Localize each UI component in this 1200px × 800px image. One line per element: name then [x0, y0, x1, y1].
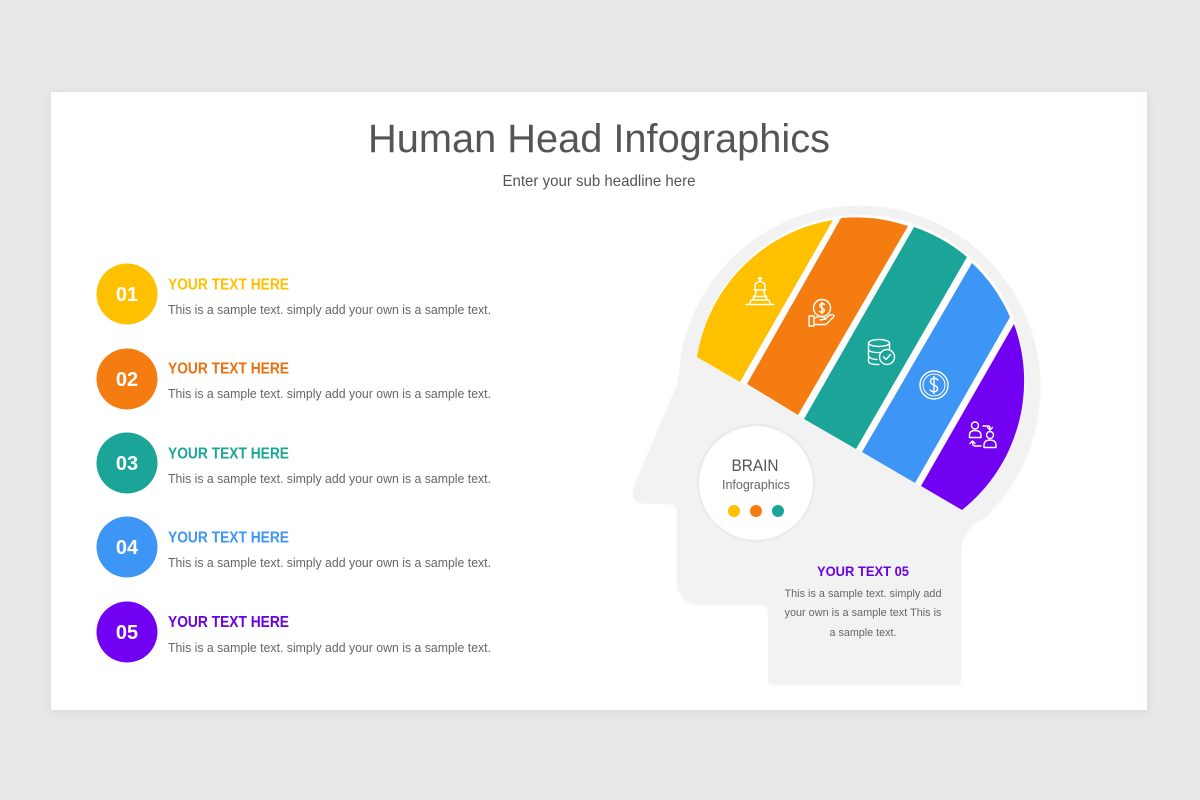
brain segment: yellow [697, 220, 833, 382]
list item 05: 05 [116, 622, 138, 644]
brain center badge [698, 425, 814, 541]
list item 03: This is a sample text. simply add your own is a sample text. [168, 472, 491, 486]
list item 01: YOUR TEXT HERE [168, 276, 289, 294]
list item 02 [96, 348, 491, 410]
list item 05 [96, 602, 491, 662]
list item 04: 04 [116, 537, 139, 559]
brain center badge: Infographics [722, 477, 790, 492]
list item 01: 01 [116, 284, 138, 306]
list item 04: This is a sample text. simply add your own is a sample text. [168, 556, 491, 570]
head silhouette [633, 206, 1040, 684]
brain segment: teal [804, 227, 967, 449]
icon: database with check [868, 340, 894, 364]
icon: dollar coin [920, 371, 948, 399]
brain segment: orange [747, 217, 908, 415]
list item 01: This is a sample text. simply add your own is a sample text. [168, 303, 491, 317]
white card panel [51, 92, 1147, 710]
list item 03: 03 [116, 453, 138, 475]
callout: your text 05: your own is a sample text This is [784, 607, 942, 619]
callout: your text 05: YOUR TEXT 05 [817, 563, 909, 579]
list item 05: This is a sample text. simply add your own is a sample text. [168, 641, 491, 655]
icon: chess piece [746, 276, 774, 304]
icon: hand holding coin [809, 300, 834, 326]
brain segment: blue [862, 263, 1010, 483]
list item 03: YOUR TEXT HERE [168, 446, 289, 462]
callout: your text 05: This is a sample text. simply add [784, 588, 942, 600]
list item 04 [96, 516, 491, 578]
list item 03 [96, 432, 491, 494]
white backing behind brain segments [697, 215, 1025, 510]
brain center badge: BRAIN [732, 456, 778, 475]
callout: your text 05: a sample text. [830, 627, 896, 639]
list item 02: This is a sample text. simply add your own is a sample text. [168, 387, 491, 401]
callout: your text 05 [784, 563, 942, 639]
list item 02: YOUR TEXT HERE [168, 360, 289, 378]
subtitle: Enter your sub headline here [502, 173, 696, 190]
title: Human Head Infographics [368, 117, 830, 161]
brain segment: purple [921, 324, 1024, 510]
list item 02: 02 [116, 369, 138, 391]
list item 05: YOUR TEXT HERE [168, 614, 289, 631]
icon: people exchange [970, 422, 996, 448]
list item 01 [96, 264, 491, 324]
list item 04: YOUR TEXT HERE [168, 530, 289, 546]
